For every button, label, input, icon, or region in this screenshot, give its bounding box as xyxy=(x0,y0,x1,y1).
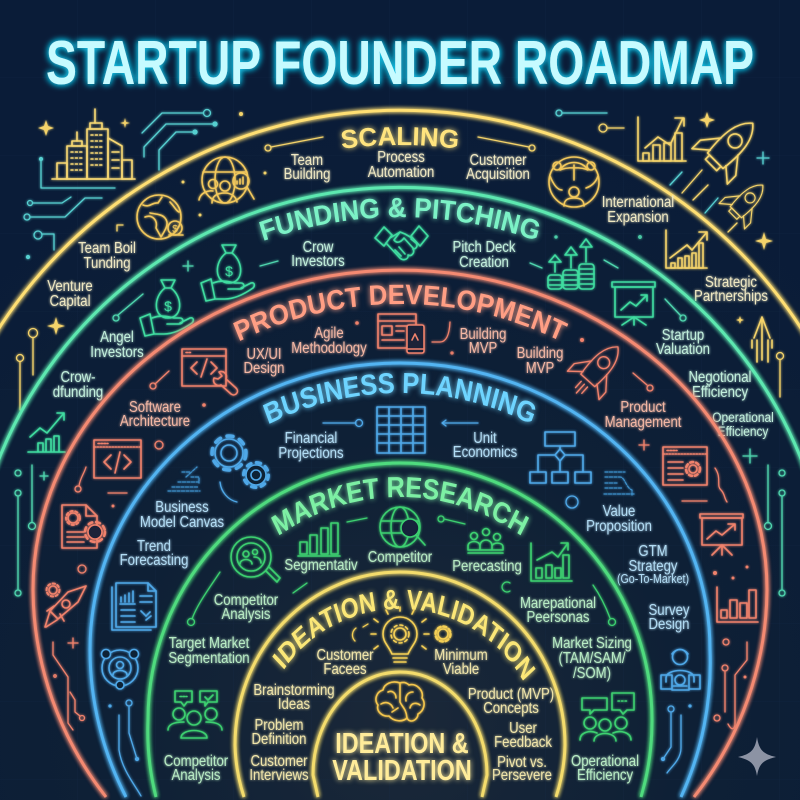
icon: spreadsheet xyxy=(377,407,425,453)
business labels: Unit xyxy=(473,430,497,447)
icon: handshake xyxy=(375,226,428,260)
scaling labels: Building xyxy=(284,166,330,183)
ideation labels: Concepts xyxy=(483,700,539,717)
icon: magnifier with people xyxy=(231,537,280,582)
product labels: MVP xyxy=(526,360,554,377)
icon: code window xyxy=(94,440,141,478)
scaling labels: Acquisition xyxy=(466,166,530,183)
scaling labels: Automation xyxy=(368,164,434,181)
funding labels: Angel xyxy=(100,329,134,346)
ideation labels: Interviews xyxy=(249,767,309,784)
icon: large rocket xyxy=(692,106,770,184)
funding labels: Valuation xyxy=(656,341,710,358)
ideation labels: Ideas xyxy=(278,696,310,713)
icon: globe with people and magnifier xyxy=(199,157,254,203)
product labels: MVP xyxy=(469,340,497,357)
ideation labels: Pivot vs. xyxy=(497,754,547,771)
core heading: VALIDATION xyxy=(332,754,472,787)
market labels: Segmentativ xyxy=(284,557,358,574)
market labels: Competitor xyxy=(214,592,278,609)
icon: globe with coin xyxy=(137,195,183,239)
business labels: Strategy xyxy=(628,558,678,575)
funding decorations xyxy=(15,236,785,596)
ideation labels: Product (MVP) xyxy=(468,686,554,703)
icon: launching rocket with gear xyxy=(45,584,86,627)
scaling labels xyxy=(47,149,768,310)
funding labels: Creation xyxy=(459,254,509,271)
business labels: Financial xyxy=(285,430,337,447)
funding labels: Operational xyxy=(712,409,774,425)
business labels: Projections xyxy=(278,445,344,462)
business labels: Economics xyxy=(453,444,517,461)
market labels: (TAM/SAM/ xyxy=(558,650,626,667)
icon: three people xyxy=(468,528,503,553)
icon: team with speech bubbles right xyxy=(580,693,634,741)
funding labels: Startup xyxy=(662,327,704,344)
heading: ideation and validation: IDEATION & VALIDATION xyxy=(269,586,539,684)
product labels: Software xyxy=(129,399,181,416)
business labels: Design xyxy=(649,616,689,633)
icon: brain xyxy=(376,682,424,721)
product decorations xyxy=(53,321,748,730)
market labels: Target Market xyxy=(169,635,249,652)
core heading: IDEATION & xyxy=(335,727,469,760)
scaling labels: Customer xyxy=(469,152,527,169)
business decorations xyxy=(109,420,691,796)
icon: money bag on hand second: $ xyxy=(164,298,172,314)
ideation labels: Customer xyxy=(250,753,308,770)
arc: scaling ring xyxy=(0,110,800,336)
market labels: Operational xyxy=(571,753,639,770)
business labels: Survey xyxy=(649,602,690,619)
business labels: Business xyxy=(155,499,209,516)
arc: funding ring xyxy=(0,187,800,469)
funding labels: Crow xyxy=(303,239,334,256)
business labels: (Go-To-Market) xyxy=(617,572,689,586)
market labels: /SOM) xyxy=(573,665,611,682)
arc: product ring xyxy=(33,270,767,797)
business labels: Trend xyxy=(137,538,171,555)
icon: red bar chart xyxy=(717,587,758,622)
funding labels: Investors xyxy=(90,344,144,361)
product labels: Architecture xyxy=(120,413,190,430)
ideation labels: Facees xyxy=(323,661,367,678)
market labels: Perecasting xyxy=(452,558,522,575)
icon: upward arrows xyxy=(752,317,772,362)
arc: inner core xyxy=(313,672,487,797)
icon: gear xyxy=(436,626,450,642)
icon: red presentation xyxy=(700,514,743,555)
business labels: GTM xyxy=(638,543,668,560)
product labels: Design xyxy=(244,360,284,377)
ideation labels: Viable xyxy=(443,661,479,678)
ideation labels: Definition xyxy=(252,731,306,748)
scaling labels: Expansion xyxy=(607,209,669,226)
heading: scaling: SCALING xyxy=(338,123,462,152)
icon: business model canvas xyxy=(168,467,200,491)
panel: business planning ring xyxy=(84,358,716,800)
heading: business planning: BUSINESS PLANNING xyxy=(260,368,539,427)
icon: sparkle watermark xyxy=(738,737,776,776)
product labels: Methodology xyxy=(291,340,367,357)
market labels: Competitor xyxy=(164,753,228,770)
ideation labels: User xyxy=(509,720,537,737)
icon: small spark xyxy=(352,624,368,641)
icon: growth bar chart xyxy=(638,117,686,161)
arc: business ring xyxy=(90,363,710,797)
icon: gears xyxy=(212,436,268,488)
icon: money bag on hand xyxy=(201,245,254,301)
product labels: Product xyxy=(620,399,666,416)
market labels xyxy=(164,549,639,784)
icon: small rocket xyxy=(719,172,776,229)
icon: money bag on hand second xyxy=(140,280,193,336)
market labels: Competitor xyxy=(368,549,432,566)
icon: flowchart xyxy=(530,432,591,483)
business labels: Proposition xyxy=(586,518,652,535)
icon: red rocket xyxy=(561,333,634,407)
title: STARTUP FOUNDER ROADMAP xyxy=(46,27,754,98)
icon: globe with coin: $ xyxy=(172,224,178,235)
product labels: Agile xyxy=(314,325,344,342)
icon: globe with magnifier xyxy=(380,507,425,547)
product labels: Building xyxy=(460,326,506,343)
panel: funding and pitching ring xyxy=(0,147,800,630)
arc: ideation ring xyxy=(235,572,565,797)
panel: scaling ring xyxy=(0,104,800,448)
icon: coin stacks with arrows xyxy=(548,239,594,289)
icon: market chart xyxy=(531,543,572,581)
icon: window with gear xyxy=(663,447,707,485)
scaling labels: Partnerships xyxy=(694,288,768,305)
market decorations xyxy=(188,516,616,626)
business labels: Model Canvas xyxy=(140,514,224,531)
product labels: Building xyxy=(517,345,563,362)
funding labels: Efficiency xyxy=(718,423,769,439)
arc: market ring xyxy=(148,463,652,797)
panel: ideation and validation ring xyxy=(230,566,570,800)
scaling labels: International xyxy=(602,194,674,211)
scaling decorations xyxy=(16,112,784,410)
business labels: Value xyxy=(603,503,635,520)
funding labels: Negotional xyxy=(689,369,751,386)
heading: funding and pitching: FUNDING & PITCHING xyxy=(256,194,542,244)
icon: team with speech bubbles left xyxy=(168,691,222,738)
product labels: Management xyxy=(605,414,681,431)
icon: people circle xyxy=(102,650,138,689)
icon: code window with wrench xyxy=(182,349,237,395)
scaling labels: Venture xyxy=(47,278,93,295)
market labels: Peersonas xyxy=(527,609,589,626)
scaling labels: Capital xyxy=(50,293,90,310)
icon: crowdfunding chart xyxy=(28,413,65,452)
market labels: Analysis xyxy=(171,767,221,784)
ideation labels: Problem xyxy=(254,717,304,734)
panel: product development ring xyxy=(28,264,772,800)
icon: global people network xyxy=(549,157,599,207)
funding labels: dfunding xyxy=(53,384,103,401)
circuit traces top left xyxy=(24,110,769,258)
business labels xyxy=(120,430,690,633)
scaling labels: Process xyxy=(377,149,425,166)
icon: lightbulb xyxy=(371,607,429,662)
product labels xyxy=(120,325,681,431)
funding labels: Investors xyxy=(291,253,345,270)
heading: product development: PRODUCT DEVELOPMENT xyxy=(230,280,572,344)
ideation labels: Feedback xyxy=(494,734,553,751)
ideation labels: Minimum xyxy=(434,647,488,664)
ideation labels: Brainstorming xyxy=(253,682,335,699)
market labels: Analysis xyxy=(221,606,271,623)
ideation labels: Customer xyxy=(316,647,374,664)
icon: document with gear xyxy=(62,505,105,548)
ideation labels: Persevere xyxy=(492,767,552,784)
icon: small growth chart xyxy=(666,230,707,268)
icon: presentation board xyxy=(612,282,655,325)
ideation labels xyxy=(249,647,554,784)
icon: report document xyxy=(112,583,156,630)
icon: money bag on hand: $ xyxy=(225,263,233,279)
icon: survey person xyxy=(661,650,700,690)
scaling labels: Tunding xyxy=(83,255,131,272)
market labels: Market Sizing xyxy=(552,635,632,652)
icon: market bars xyxy=(298,523,340,556)
scaling labels: Strategic xyxy=(705,274,757,291)
core heading xyxy=(332,727,472,787)
product labels: UX/UI xyxy=(246,346,282,363)
business labels: Forecasting xyxy=(120,552,188,569)
scaling labels: Team Boil xyxy=(78,240,136,257)
market labels: Segmentation xyxy=(168,650,250,667)
icon: value proposition xyxy=(604,472,635,495)
scaling labels: Team xyxy=(291,152,323,169)
icon: city skyline xyxy=(52,109,135,179)
icon: web and mobile wireframe xyxy=(378,314,424,353)
market labels: Marepational xyxy=(520,595,596,612)
funding labels: Crow- xyxy=(60,369,96,386)
funding labels: Pitch Deck xyxy=(453,239,516,256)
funding labels xyxy=(53,239,774,439)
market labels: Efficiency xyxy=(577,767,634,784)
heading: market research: MARKET RESEARCH xyxy=(268,472,532,538)
funding labels: Efficiency xyxy=(692,384,749,401)
panel: market research ring xyxy=(142,458,658,800)
